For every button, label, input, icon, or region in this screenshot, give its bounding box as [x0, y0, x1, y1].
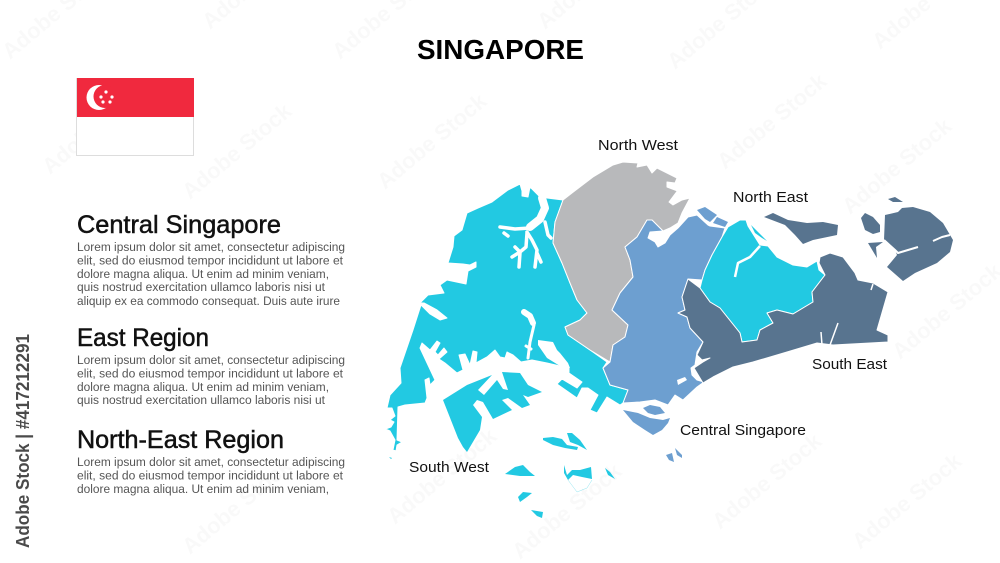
stock watermarks: Adobe Stock [837, 113, 957, 219]
region: West (South West) [386, 184, 628, 518]
sub-element: Pulau Ubin [764, 213, 838, 244]
text block: East Region: Lorem ipsum dolor sit amet, consectetur adipiscing [77, 353, 345, 367]
sub-element: small eastern islands [861, 197, 903, 258]
text block: North-East Region [77, 426, 345, 496]
label: South West: South West [409, 459, 490, 476]
stock watermarks: Adobe Stock [177, 98, 297, 204]
label: North West: North West [598, 137, 679, 154]
map of Singapore [386, 162, 953, 518]
sub-element: southern islets [623, 405, 682, 462]
text block: Central Singapore: quis nostrud exercitation ullamco laboris nisi ut [77, 280, 326, 294]
label: North East: North East [733, 189, 809, 206]
text block: East Region: East Region [77, 324, 209, 352]
text block: North-East Region: elit, sed do eiusmod tempor incididunt ut labore et [77, 468, 344, 482]
text block: Central Singapore: elit, sed do eiusmod tempor incididunt ut labore et [77, 254, 344, 268]
stock watermarks: Adobe Stock [712, 68, 832, 174]
text block: East Region: dolore magna aliqua. Ut enim ad minim veniam, [77, 380, 329, 394]
label: Central Singapore: Central Singapore [680, 422, 806, 439]
text block: North-East Region: Lorem ipsum dolor sit amet, consectetur adipiscing [77, 455, 345, 469]
stock watermarks: Adobe Stock [707, 428, 827, 534]
region: Central Singapore [603, 207, 728, 462]
icon: Singapore flag [76, 78, 194, 156]
text block: Central Singapore [77, 211, 345, 308]
text block: North-East Region: North-East Region [77, 426, 284, 454]
sub-element: Jurong Island [443, 372, 542, 452]
sub-element: southern islands [389, 433, 615, 518]
text block: East Region: quis nostrud exercitation ullamco laboris nisi ut [77, 393, 326, 407]
text block: East Region: elit, sed do eiusmod tempor incididunt ut labore et [77, 366, 344, 380]
region: North West [553, 162, 690, 362]
stock watermarks: Adobe Stock [37, 73, 157, 179]
text block: Central Singapore: Lorem ipsum dolor sit amet, consectetur adipiscing [77, 240, 345, 254]
region: North East [700, 220, 825, 342]
text block: North-East Region: dolore magna aliqua. Ut enim ad minim veniam, [77, 482, 329, 496]
stock watermarks: Adobe Stock [507, 458, 627, 563]
title: SINGAPORE [417, 34, 584, 65]
stock credit: Adobe Stock | #417212291 [13, 334, 33, 548]
text block: Central Singapore: aliquip ex ea commodo consequat. Duis aute irure [77, 294, 340, 308]
stock watermarks: Adobe Stock [177, 453, 297, 559]
text block: East Region [77, 324, 345, 407]
label: South East: South East [812, 356, 888, 373]
text block: Central Singapore: dolore magna aliqua. Ut enim ad minim veniam, [77, 267, 329, 281]
stock watermarks: Adobe Stock [382, 423, 502, 529]
stock watermarks: Adobe Stock [847, 448, 967, 554]
region: South East [678, 197, 953, 383]
text block: Central Singapore: Central Singapore [77, 211, 281, 239]
sub-element: Pulau Tekong [884, 207, 953, 281]
sub-element: northern patches [697, 207, 728, 227]
sub-element: river network of the West region [500, 198, 570, 368]
stock watermarks: Adobe Stock [372, 88, 492, 194]
sub-element: northern sliver [751, 225, 767, 241]
